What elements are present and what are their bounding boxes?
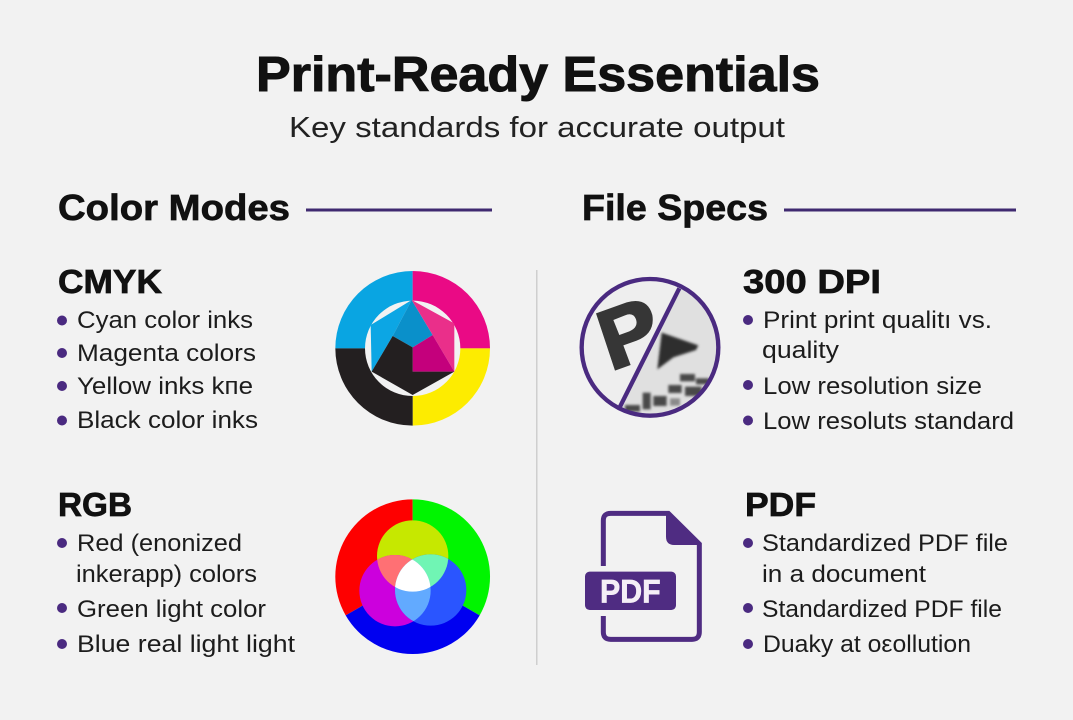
panel: RGB xyxy=(57,486,490,658)
bullet list: CMYK: Magenta colors xyxy=(77,340,256,367)
bullet list: PDF: Standardized PDF file xyxy=(762,530,1008,557)
bullet list: 300 DPI: quality xyxy=(762,337,839,364)
bullet list: RGB: Green light color xyxy=(77,596,266,623)
panel: CMYK xyxy=(57,263,490,434)
glyph: sharp P xyxy=(596,301,653,371)
icon: RGB wheel xyxy=(335,499,490,654)
glyph: pixelated arrow xyxy=(657,333,698,369)
bullet list: RGB xyxy=(57,530,295,658)
heading: RGB: RGB xyxy=(58,486,132,523)
bullet list: RGB: Red (enonized xyxy=(77,530,242,557)
bullet list: PDF: in a document xyxy=(762,561,926,588)
icon: PDF file: PDF xyxy=(600,572,661,609)
heading: 300 DPI: 300 DPI xyxy=(743,263,881,300)
bullet list: PDF xyxy=(743,530,1008,658)
bullet list: PDF: Duaky at oεollution xyxy=(763,631,971,658)
heading: PDF: PDF xyxy=(745,486,816,523)
bullet list: RGB: inkerapp) colors xyxy=(76,561,257,588)
bullet list: CMYK xyxy=(57,307,258,434)
title: Print-Ready Essentials xyxy=(256,48,820,102)
heading: Color Modes: Color Modes xyxy=(58,187,290,228)
bullet list: 300 DPI xyxy=(743,307,1014,435)
icon: PDF file xyxy=(585,512,701,639)
bullet list: CMYK: Yellow inks kпe xyxy=(77,373,253,400)
heading: File Specs: File Specs xyxy=(582,187,768,228)
bullet list: CMYK: Cyan color inks xyxy=(77,307,253,334)
panel: PDF xyxy=(585,486,1008,658)
icon: resolution comparison xyxy=(582,279,723,420)
heading: CMYK: CMYK xyxy=(58,263,162,300)
bullet list: RGB: Blue real light light xyxy=(77,631,295,658)
subtitle: Key standards for accurate output xyxy=(289,112,785,144)
panel: file specs heading xyxy=(582,187,1016,228)
bullet list: CMYK: Black color inks xyxy=(77,407,258,434)
panel: 300 DPI xyxy=(582,263,1014,435)
bullet list: 300 DPI: Print print qualitı vs. xyxy=(763,307,992,334)
icon: CMYK wheel xyxy=(335,271,490,426)
panel: color modes heading xyxy=(58,187,492,228)
bullet list: 300 DPI: Low resoluts standard xyxy=(763,408,1014,435)
bullet list: PDF: Standardized PDF file xyxy=(762,596,1002,623)
bullet list: 300 DPI: Low resolution size xyxy=(763,373,982,400)
